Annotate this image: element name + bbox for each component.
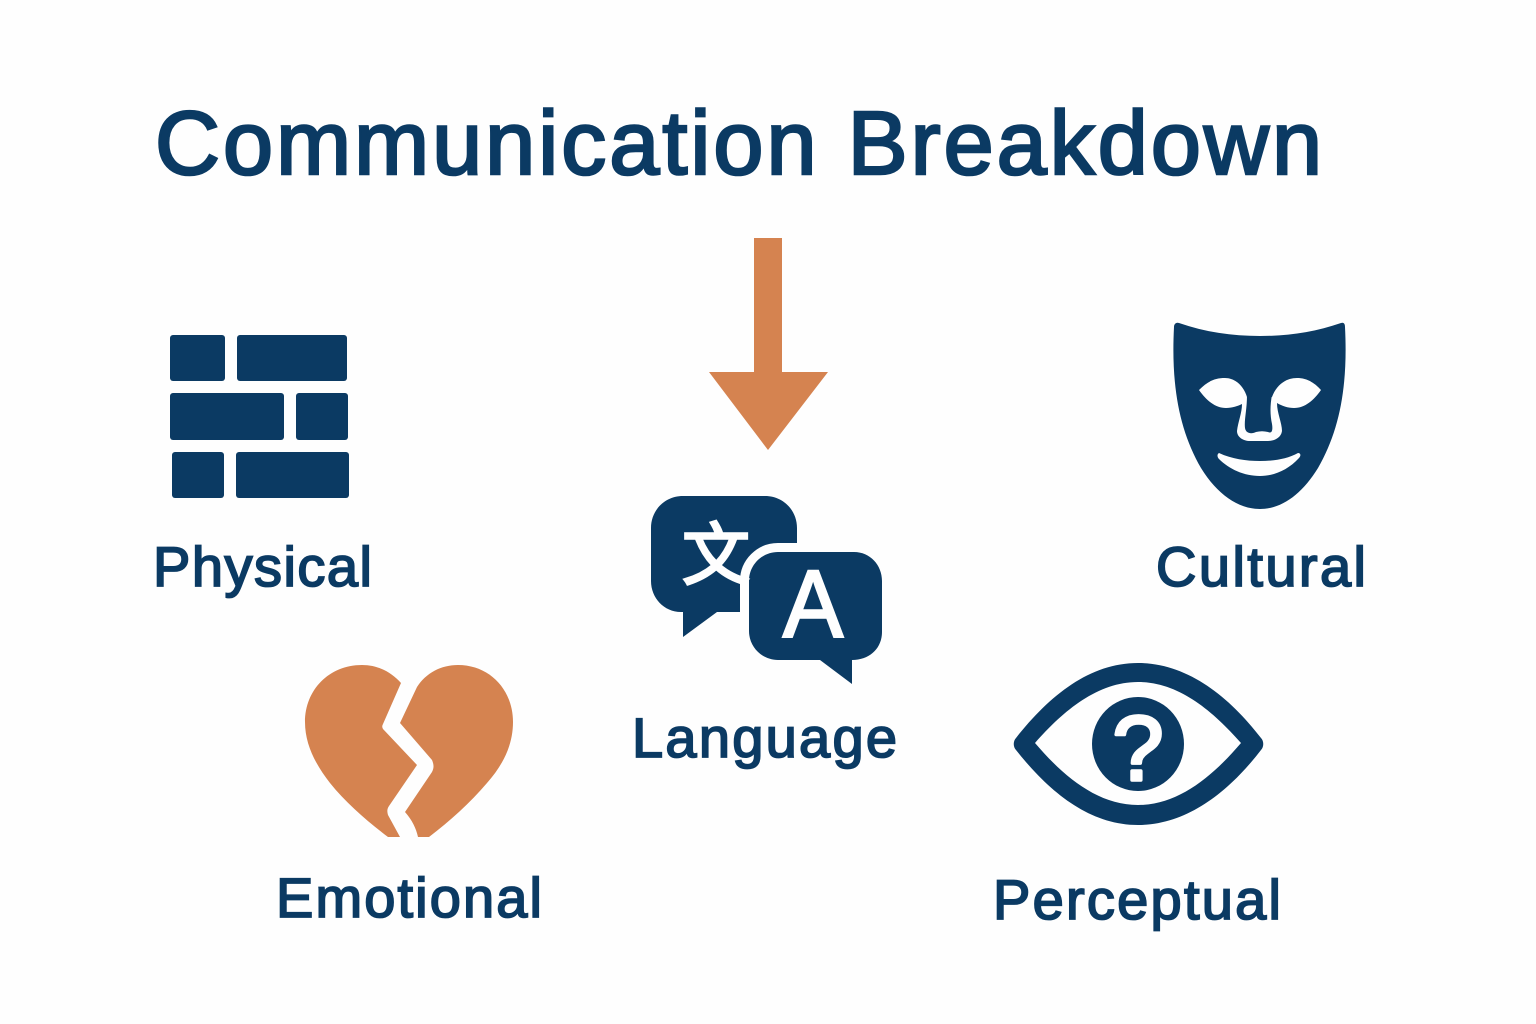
icon: eye with question mark — [1014, 663, 1263, 825]
icon: translation speech bubbles: A — [783, 551, 843, 658]
group: emotional barrier — [276, 665, 542, 929]
label: physical: Physical — [153, 535, 372, 598]
icon: eye with question mark: ? — [1112, 698, 1164, 800]
label: cultural: Cultural — [1156, 535, 1366, 598]
icon: broken heart — [305, 665, 513, 837]
group: cultural barrier — [1156, 323, 1366, 598]
icon: brick wall — [170, 335, 349, 498]
group: language barrier — [632, 496, 897, 769]
icon: translation speech bubbles — [651, 496, 882, 684]
arrow: down into language — [709, 238, 828, 450]
label: language: Language — [632, 706, 897, 769]
icon: translation speech bubbles: 文 — [682, 518, 750, 594]
icon: theatre mask — [1173, 323, 1346, 509]
title: Communication Breakdown — [155, 94, 1322, 194]
label: perceptual: Perceptual — [993, 868, 1281, 931]
label: emotional: Emotional — [276, 866, 542, 929]
group: physical barrier — [153, 335, 372, 598]
group: perceptual barrier — [993, 663, 1281, 931]
